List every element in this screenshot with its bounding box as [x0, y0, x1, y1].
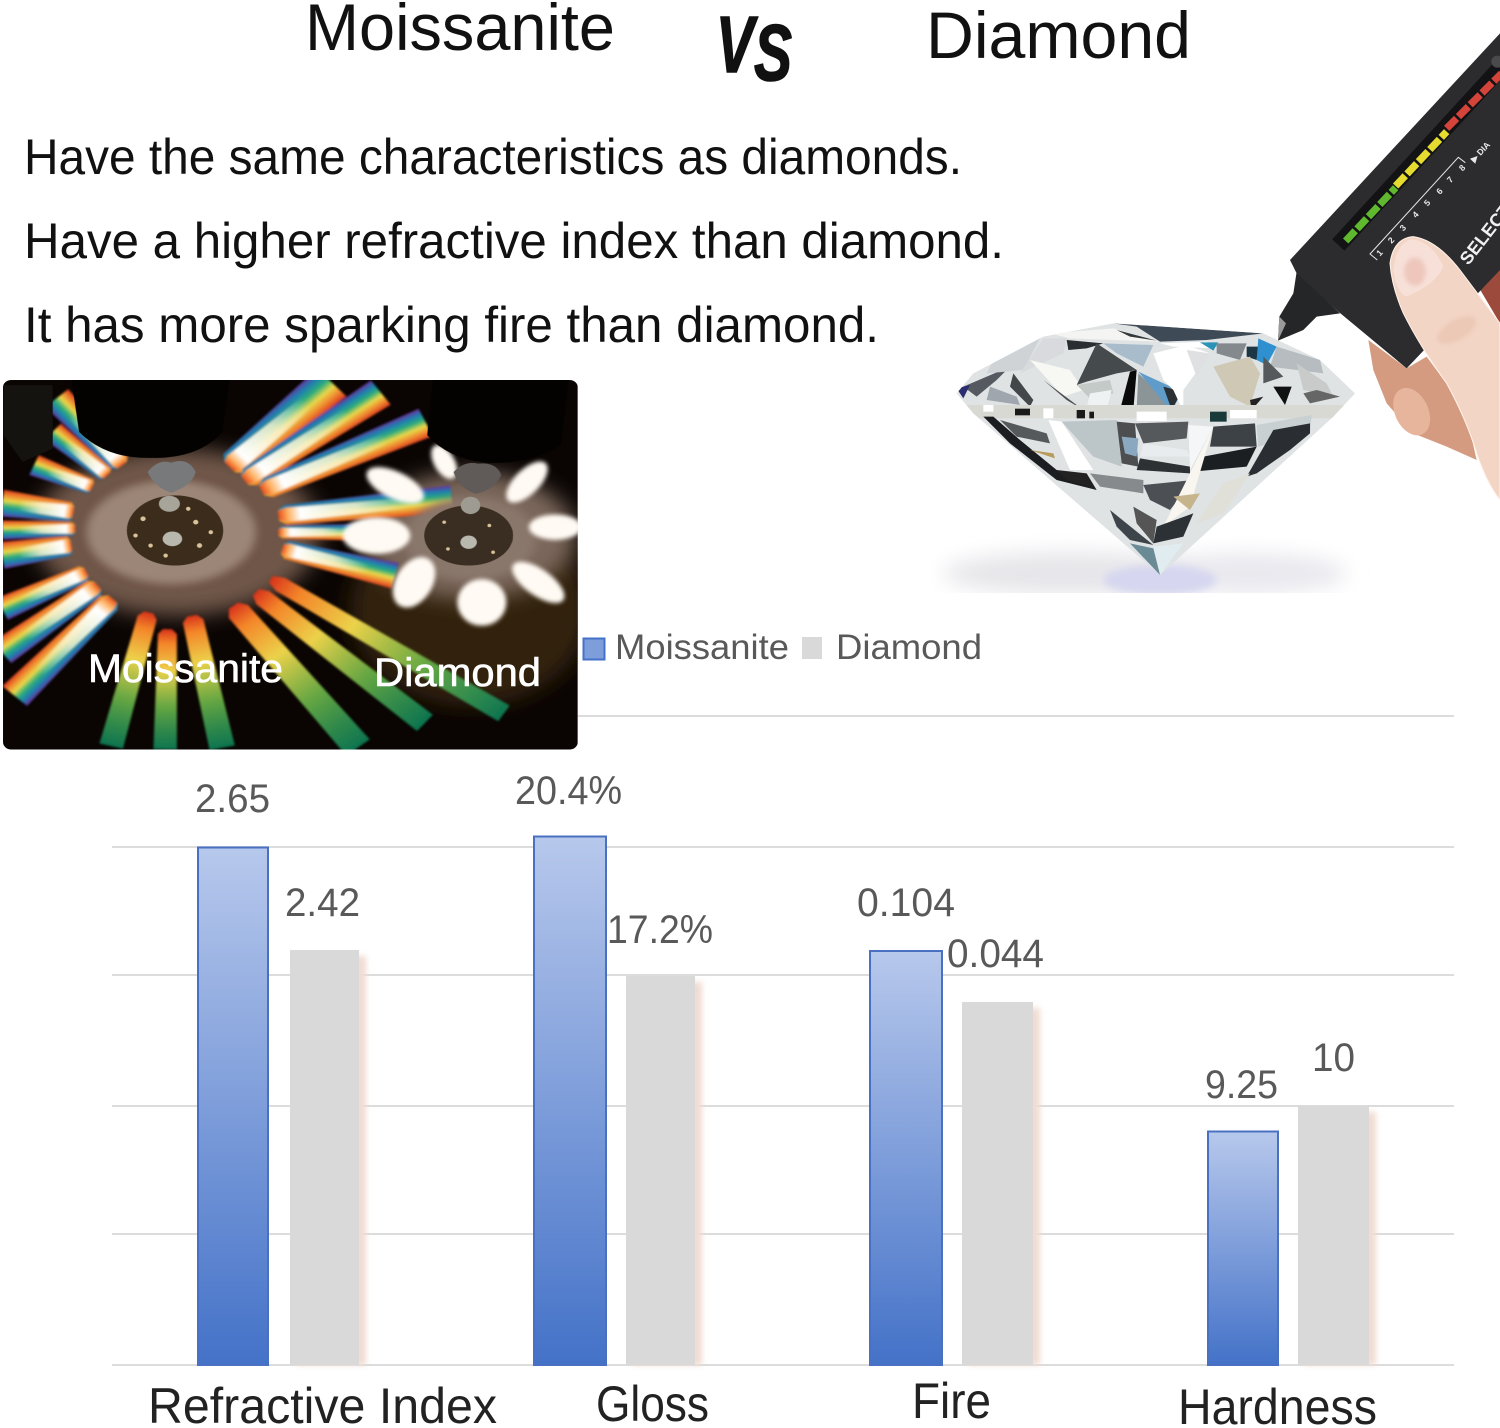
- text block: characteristics: Have the same characteristics as diamonds.: [24, 129, 962, 185]
- diamond reflection: [943, 552, 1347, 595]
- scale bracket and numbers: ▶ DIA: [1468, 139, 1493, 165]
- bar group: Refractive Index: 2.42: [285, 881, 360, 925]
- bar group: Gloss: 20.4%: [515, 769, 622, 813]
- chart legend: Diamond: [836, 628, 982, 667]
- illustration: hand holding diamond tester: [1278, 33, 1500, 500]
- scale bracket and numbers: 8: [1457, 163, 1468, 173]
- title: VS emblem: S: [754, 8, 792, 97]
- bar group: Fire: [857, 881, 1044, 1365]
- bar group: Fire: 0.044: [947, 932, 1044, 976]
- text block: characteristics: Have a higher refractive index than diamond.: [24, 213, 1004, 269]
- scale bracket and numbers: 4: [1410, 209, 1421, 220]
- tester body: [1290, 33, 1500, 368]
- scale bracket and numbers: 2: [1386, 235, 1397, 245]
- text block: characteristics: [24, 129, 1004, 353]
- scale bracket and numbers: 5: [1422, 198, 1433, 208]
- scale bracket and numbers: [1370, 139, 1493, 260]
- photo label: Moissanite: Moissanite: [88, 647, 283, 691]
- diamond gem: [953, 320, 1360, 580]
- bar group: Gloss: 17.2%: [607, 908, 713, 952]
- chart legend: Moissanite: [615, 628, 789, 667]
- title: VS emblem: V: [716, 0, 769, 89]
- text block: characteristics: It has more sparking fire than diamond.: [24, 297, 879, 353]
- chart axis labels: Fire: [912, 1373, 991, 1428]
- scale bracket and numbers: 6: [1434, 186, 1445, 196]
- chart legend: [584, 628, 982, 667]
- bar group: Hardness: 9.25: [1205, 1063, 1278, 1107]
- chart grid lines: [112, 716, 1454, 1365]
- bar group: Gloss: [515, 769, 713, 1365]
- scale bracket and numbers: 3: [1397, 223, 1408, 233]
- tester button: [1491, 56, 1500, 68]
- bar group: Refractive Index: 2.65: [195, 777, 270, 821]
- bar group: Hardness: 10: [1312, 1036, 1355, 1080]
- chart axis labels: [148, 1373, 1377, 1428]
- photo panel: fire comparison: [0, 368, 591, 756]
- title: Diamond: Diamond: [926, 0, 1191, 72]
- hand: [1368, 268, 1500, 460]
- LED scale: [1338, 68, 1500, 245]
- tester probe: [1278, 272, 1340, 341]
- thumb: [1390, 237, 1500, 500]
- bar group: Fire: 0.104: [857, 881, 955, 925]
- bar group: Hardness: [1205, 1036, 1376, 1365]
- illustration: diamond: [943, 320, 1360, 595]
- bar group: Refractive Index: [195, 777, 366, 1365]
- scale bracket and numbers: 7: [1445, 174, 1456, 185]
- photo label: Diamond: Diamond: [374, 651, 541, 695]
- scale bracket and numbers: 1: [1374, 248, 1385, 258]
